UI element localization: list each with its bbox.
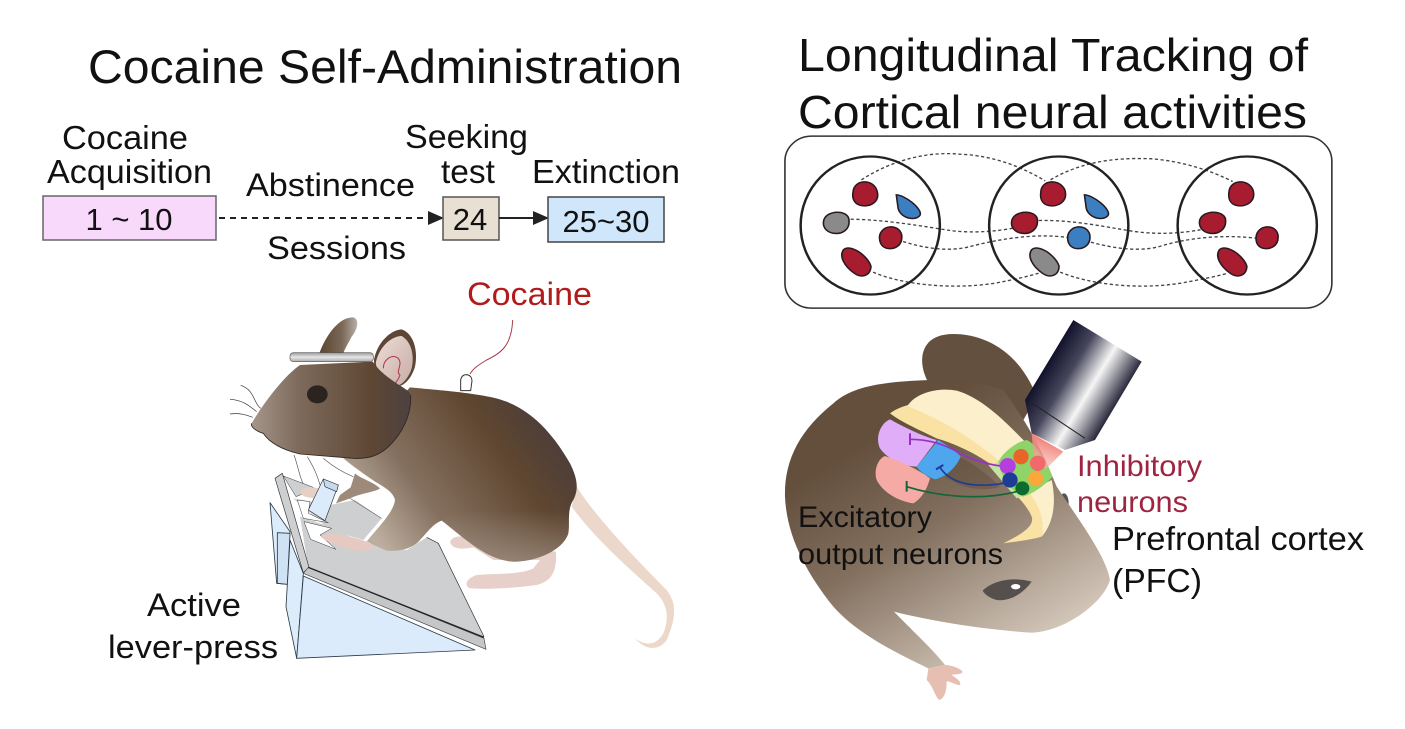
label: Abstinence: Abstinence	[246, 167, 415, 203]
label: Excitatory output neurons	[798, 501, 1003, 571]
far paw	[300, 487, 318, 498]
label: Prefrontal cortex (PFC)	[1112, 520, 1365, 599]
box: session 24: 24	[453, 202, 487, 237]
imaging field: day 1	[801, 156, 940, 294]
far arms	[294, 455, 353, 487]
brain and projections	[876, 390, 1063, 543]
near paw	[321, 534, 377, 552]
blue region	[917, 440, 961, 479]
arrow: dashed abstinence arrow	[219, 217, 442, 219]
label: Active lever-press	[108, 587, 278, 665]
label: Active lever-press: Active	[147, 587, 241, 623]
eye	[983, 579, 1032, 600]
lever handle	[308, 479, 338, 521]
pale green strip	[988, 462, 1030, 498]
back block	[270, 503, 290, 584]
label: Cocaine Acquisition: Cocaine	[62, 119, 188, 156]
timeline: session schedule	[43, 118, 680, 266]
objective lens	[1025, 320, 1142, 450]
label: Cocaine infusion: Cocaine	[467, 276, 592, 312]
tracking lines	[851, 154, 1256, 286]
panel: longitudinal neuron tracking	[785, 136, 1332, 308]
box: sessions 25 to 30: 25~30	[562, 204, 650, 239]
body	[785, 379, 1110, 668]
icon: catheter port	[461, 375, 472, 391]
tail inner band	[1003, 492, 1043, 543]
hind legs	[450, 536, 556, 589]
side strip	[275, 473, 309, 573]
head	[251, 362, 411, 458]
back ear	[319, 317, 357, 353]
neuron: blue projection	[936, 465, 1018, 488]
white gaps	[304, 522, 336, 549]
ear	[374, 329, 416, 386]
label: Prefrontal cortex (PFC): Prefrontal cortex	[1112, 520, 1365, 557]
icon: catheter line	[470, 320, 513, 374]
cream cortex	[907, 390, 1025, 462]
label: Inhibitory neurons: neurons	[1077, 486, 1188, 519]
small far eye	[1059, 493, 1069, 513]
title: Longitudinal Tracking of Cortical neural activities: Cortical neural activities	[798, 86, 1307, 138]
head bar	[290, 353, 373, 362]
tail	[572, 487, 674, 648]
body	[343, 387, 577, 562]
purple region	[878, 419, 937, 467]
label: Extinction: Extinction	[532, 153, 680, 190]
title: Longitudinal Tracking of Cortical neural activities: Longitudinal Tracking of	[798, 29, 1308, 81]
label: Inhibitory neurons	[1077, 450, 1202, 519]
paw	[927, 665, 963, 700]
title: Longitudinal Tracking of Cortical neural activities	[798, 29, 1308, 138]
box: sessions 25 to 30	[548, 197, 664, 242]
illustration: mouse pressing lever	[230, 317, 674, 658]
box: session 24	[443, 197, 499, 240]
rump shading	[442, 510, 568, 562]
ramp side	[286, 540, 303, 658]
panel frame	[785, 136, 1332, 308]
forearm	[336, 473, 380, 503]
objective beam	[1032, 433, 1063, 468]
shadow under regions	[945, 457, 1000, 489]
imaging field: day 2	[989, 156, 1128, 294]
neuron: green projection	[907, 481, 1029, 497]
imaging field: day 3	[1178, 156, 1317, 294]
label: Seeking test: Seeking	[405, 118, 528, 155]
neuron: purple projection	[910, 433, 1016, 474]
pink region	[876, 456, 930, 503]
label: Active lever-press: lever-press	[108, 629, 278, 665]
arrow: to extinction	[499, 217, 547, 219]
upper surface	[283, 476, 313, 497]
label: Seeking test	[405, 118, 528, 190]
yellow band	[890, 403, 1003, 466]
box: sessions 1 to 10	[43, 196, 216, 240]
illustration: mouse head with microscope	[785, 320, 1142, 700]
whiskers	[230, 385, 261, 417]
label: Seeking test: test	[441, 153, 495, 190]
eye	[307, 385, 328, 403]
ramp front	[297, 576, 475, 658]
box: sessions 1 to 10: 1 ~ 10	[85, 202, 173, 237]
operant box with lever	[270, 473, 486, 658]
head lower outline	[251, 395, 411, 458]
ramp top surface	[300, 517, 484, 637]
label: Inhibitory neurons: Inhibitory	[1077, 450, 1202, 483]
label: Sessions: Sessions	[267, 230, 406, 266]
front strip	[303, 567, 486, 649]
green PFC	[998, 440, 1053, 497]
label: Cocaine Acquisition: Acquisition	[47, 153, 212, 190]
label: Excitatory output neurons: Excitatory	[798, 501, 932, 534]
tail cream	[1028, 480, 1054, 537]
ear	[922, 334, 1037, 420]
title: Cocaine Self-Administration: Cocaine Self-Administration	[88, 40, 682, 93]
label: Cocaine Acquisition	[47, 119, 212, 190]
inhibitory neurons	[1013, 449, 1045, 486]
label: Prefrontal cortex (PFC): (PFC)	[1112, 562, 1202, 599]
label: Excitatory output neurons: output neurons	[798, 538, 1003, 571]
